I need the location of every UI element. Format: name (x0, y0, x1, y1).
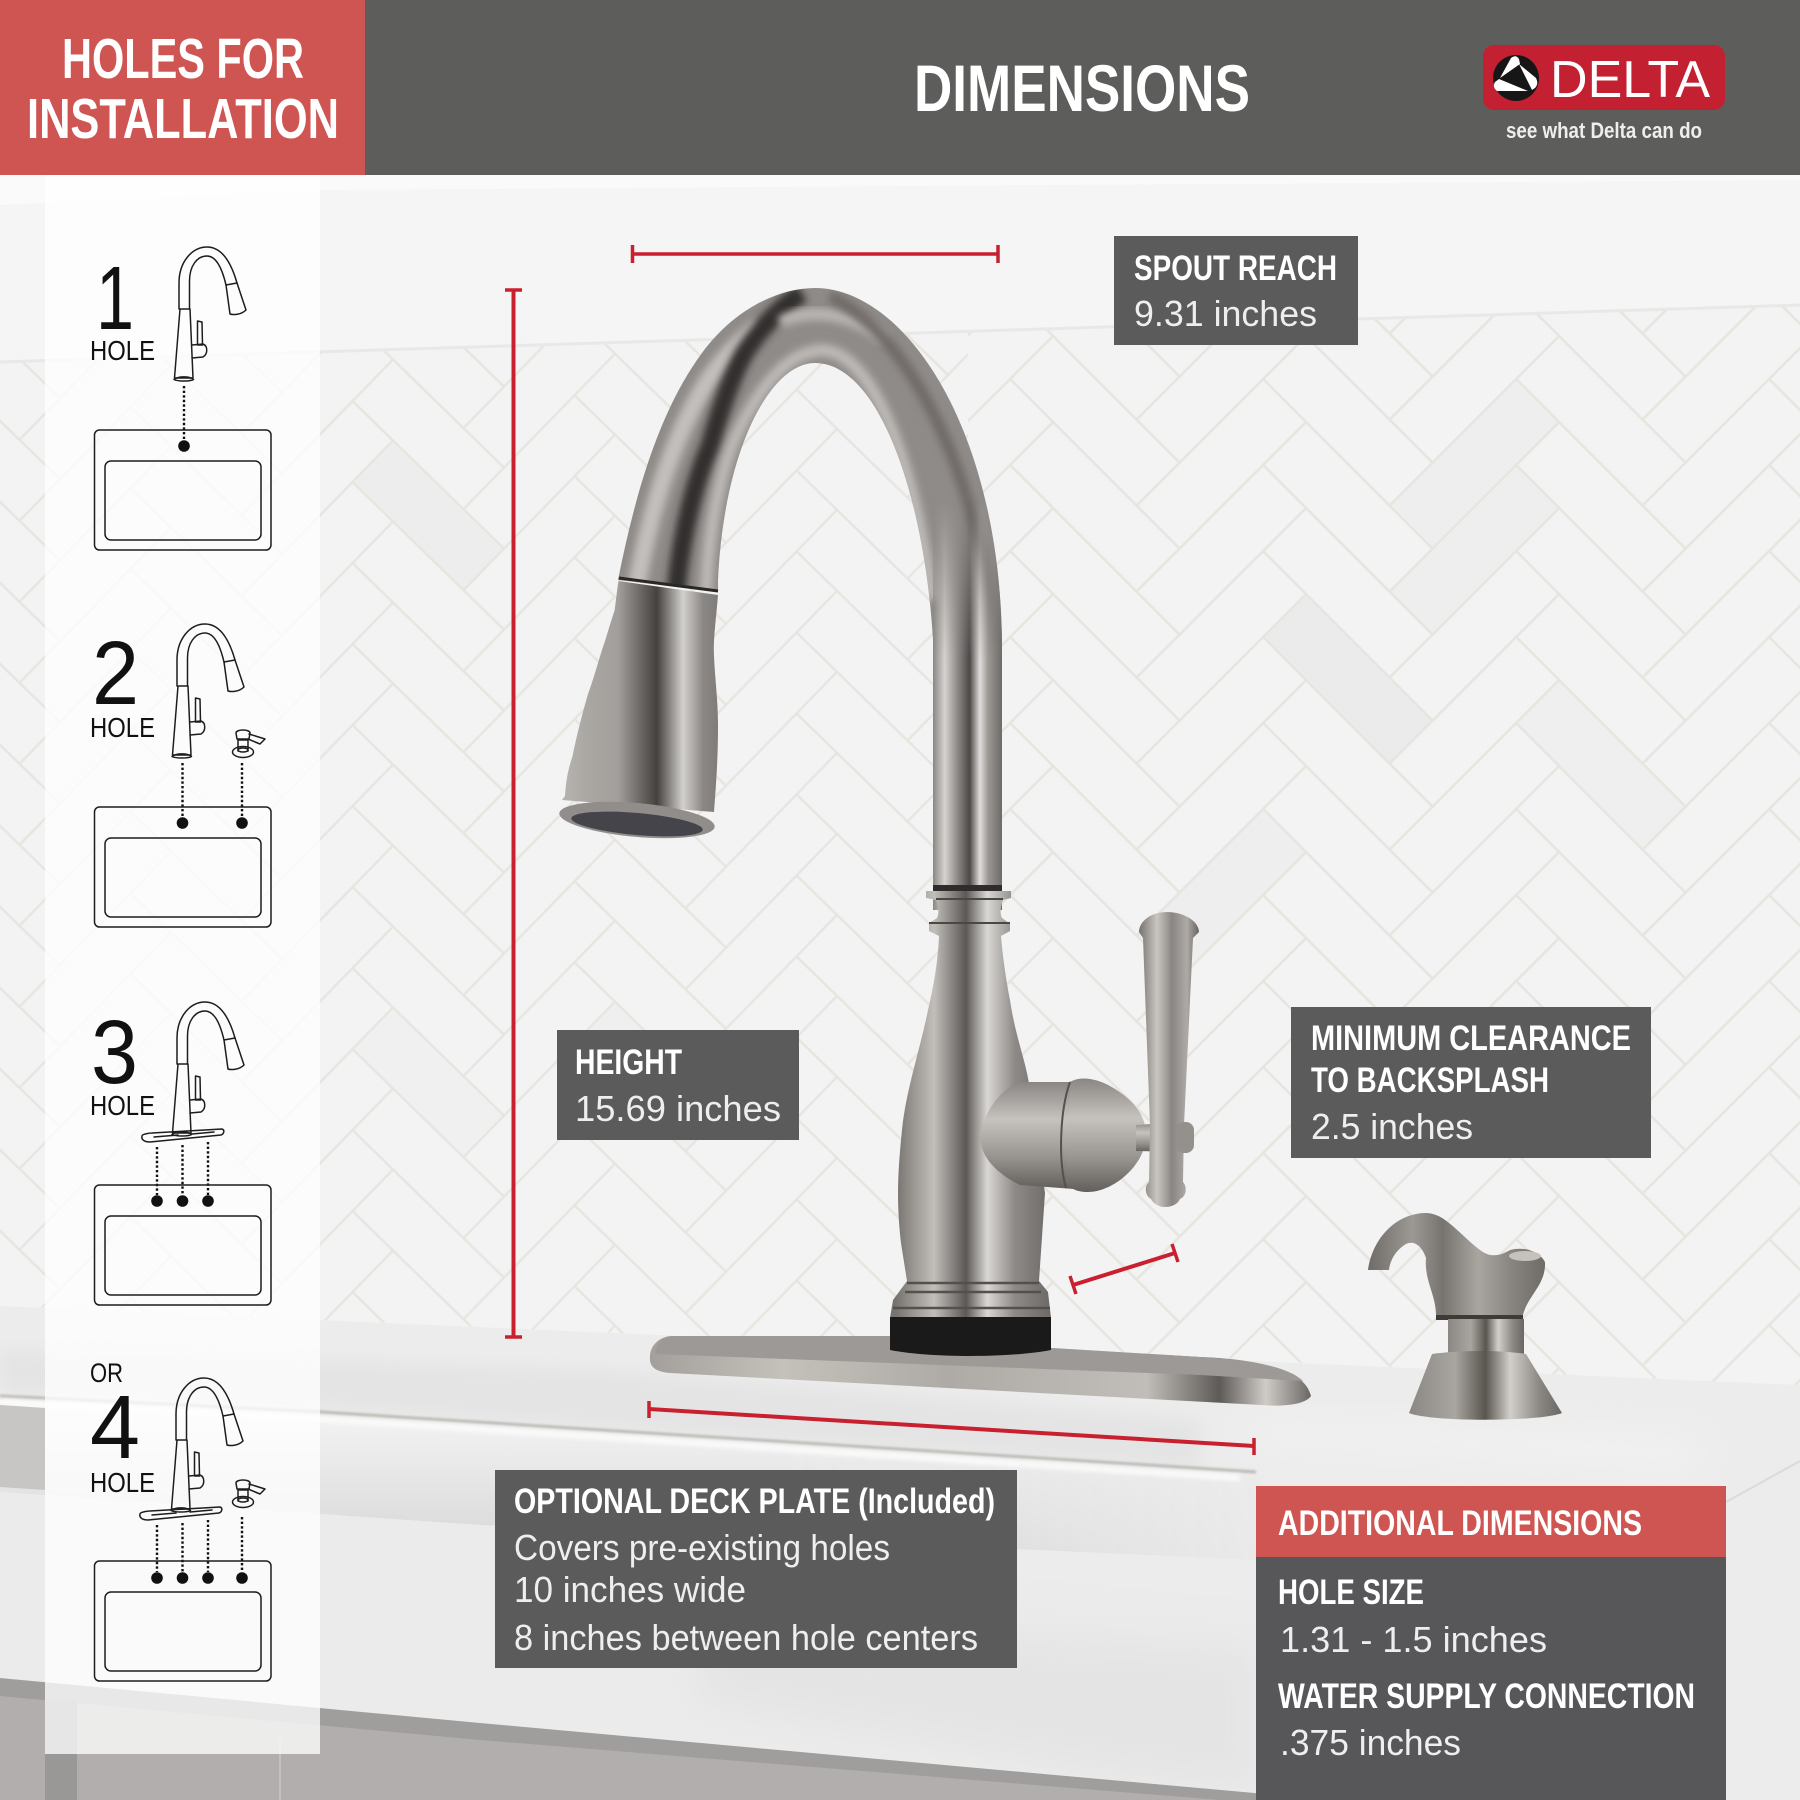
callout: minimum clearance: MINIMUM CLEARANCE (1311, 1019, 1631, 1058)
callout: optional deck plate: 10 inches wide (514, 1569, 746, 1610)
callout: minimum clearance: 2.5 inches (1311, 1106, 1473, 1147)
panel body (1256, 1557, 1726, 1800)
handle hub (981, 1079, 1180, 1192)
callout: spout reach (1114, 236, 1358, 345)
sink shadow at left (0, 1405, 45, 1490)
herringbone tile wall, left section (0, 300, 968, 1400)
callout: height (557, 1030, 799, 1140)
panel: additional dimensions: 1.31 - 1.5 inches (1280, 1619, 1547, 1660)
panel: holes for installation backdrop (45, 175, 320, 1754)
panel: additional dimensions: .375 inches (1280, 1722, 1461, 1763)
installation option: 1 hole (90, 247, 271, 550)
handle stem disk (1176, 1122, 1194, 1153)
dimension line: deck plate width (649, 1401, 1254, 1455)
installation option: 2 hole: HOLE (90, 712, 155, 743)
installation option: 3 hole: 3 (91, 1003, 138, 1103)
heading: holes for installation: INSTALLATION (27, 87, 339, 151)
installation option: or 4 hole (90, 1358, 271, 1681)
gooseneck spout (618, 288, 1002, 910)
panel: additional dimensions: HOLE SIZE (1278, 1573, 1424, 1612)
soffit highlight (0, 175, 1800, 205)
installation option: 3 hole (90, 1002, 271, 1305)
handle lever (1139, 912, 1199, 1207)
panel: additional dimensions (1256, 1486, 1726, 1800)
callout: spout reach: 9.31 inches (1134, 293, 1317, 334)
counter lip shadow (0, 1396, 1256, 1472)
faucet body with collar (890, 885, 1051, 1356)
installation option: or 4 hole: OR (90, 1358, 123, 1388)
header red block (0, 0, 365, 175)
soap dispenser (1368, 1213, 1562, 1420)
Delta logo: DELTA (1550, 51, 1710, 109)
heading: holes for installation (27, 27, 339, 151)
callout: optional deck plate (495, 1470, 1017, 1668)
Delta logo (1483, 45, 1725, 143)
callout: optional deck plate: OPTIONAL DECK PLATE (Included) (514, 1482, 995, 1521)
title: dimensions: DIMENSIONS (914, 51, 1250, 125)
counter front face (0, 1395, 1800, 1800)
pull-down spray head (558, 578, 718, 844)
callout: optional deck plate: 8 inches between hole centers (514, 1617, 978, 1658)
installation option: 1 hole: HOLE (90, 335, 155, 366)
callout: minimum clearance (1291, 1007, 1651, 1158)
callout: minimum clearance: TO BACKSPLASH (1311, 1061, 1549, 1100)
herringbone tile wall, right section (968, 300, 1800, 1400)
dimension line: spout reach (632, 245, 998, 263)
panel: additional dimensions: ADDITIONAL DIMENSIONS (1278, 1504, 1642, 1543)
header bar (0, 0, 1800, 175)
installation option: 1 hole: 1 (96, 249, 134, 349)
installation option: 2 hole (90, 624, 271, 927)
callout: height: 15.69 inches (575, 1088, 781, 1129)
header grey band (0, 0, 1800, 175)
installation option: or 4 hole: 4 (90, 1378, 140, 1478)
counter top surface (0, 1306, 1800, 1502)
deck plate (650, 1336, 1311, 1406)
installation option: 2 hole: 2 (92, 624, 139, 724)
callout: optional deck plate: Covers pre-existing holes (514, 1527, 890, 1568)
Delta logo: see what Delta can do (1506, 118, 1702, 143)
heading: holes for installation: HOLES FOR (62, 27, 304, 91)
installation option: 3 hole: HOLE (90, 1090, 155, 1121)
dimension line: height (505, 290, 522, 1337)
cabinet below the counter (0, 1680, 1330, 1800)
panel heading bar (1256, 1486, 1726, 1557)
dimension line: backsplash clearance (1070, 1244, 1178, 1294)
installation option: or 4 hole: HOLE (90, 1467, 155, 1498)
panel: additional dimensions: WATER SUPPLY CONNECTION (1278, 1677, 1695, 1716)
callout: height: HEIGHT (575, 1043, 682, 1082)
callout: spout reach: SPOUT REACH (1134, 249, 1337, 288)
faucet photo illustration (558, 270, 1562, 1420)
